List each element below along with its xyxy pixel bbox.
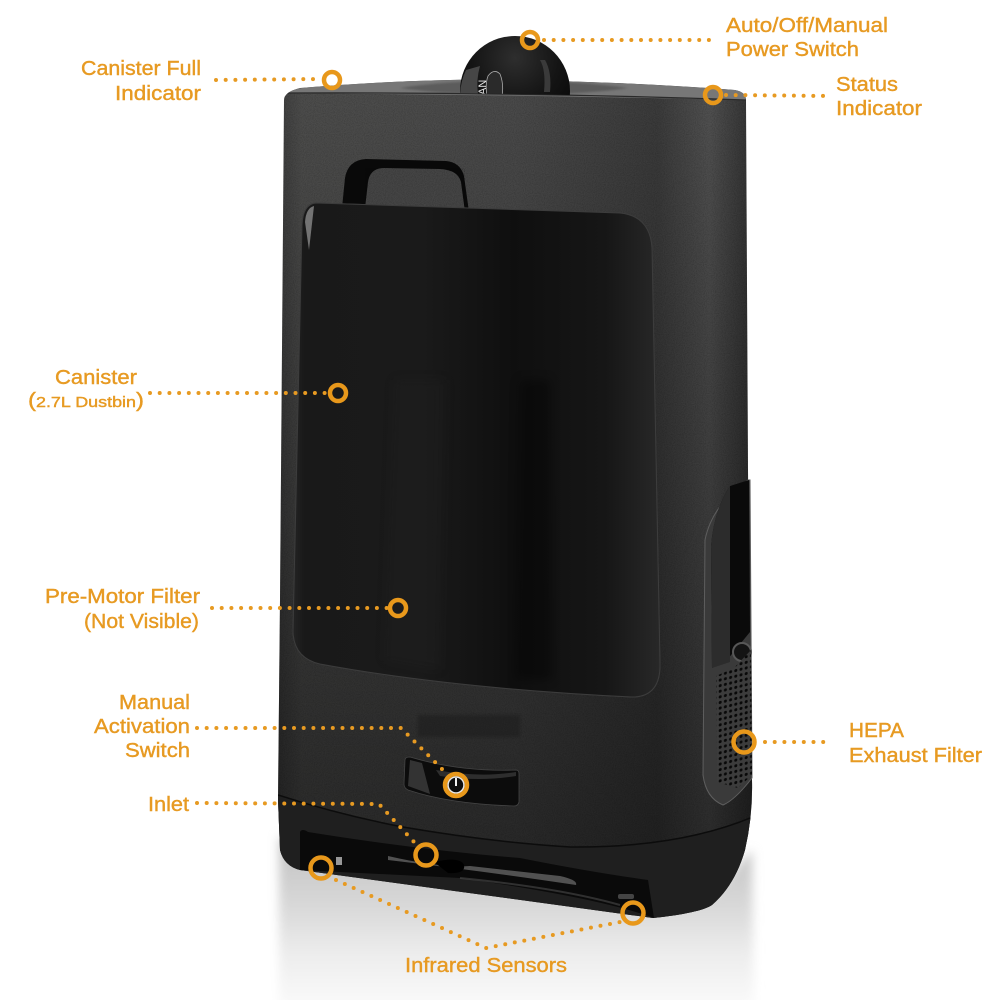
vacuum body bbox=[270, 80, 770, 920]
callout: inlet: Inlet bbox=[148, 794, 189, 816]
callout: inlet bbox=[148, 794, 436, 866]
canister handle recess bbox=[342, 159, 469, 212]
HEPA side panel bbox=[703, 480, 752, 805]
callout: status indicator bbox=[705, 74, 922, 120]
callout: status indicator: Status bbox=[836, 74, 898, 96]
callout: pre-motor filter bbox=[45, 586, 406, 633]
callout: canister full indicator: Canister Full bbox=[81, 58, 201, 80]
callout: canister: Canister bbox=[55, 367, 137, 389]
callout: canister full indicator bbox=[81, 58, 340, 105]
callout: canister: (2.7L Dustbin ) bbox=[28, 390, 144, 412]
callout: HEPA exhaust filter bbox=[734, 720, 982, 767]
callout: power switch: Auto/Off/Manual bbox=[726, 15, 888, 37]
callout: HEPA exhaust filter: HEPA bbox=[849, 720, 905, 742]
callout: canister bbox=[28, 367, 346, 412]
base band bbox=[278, 795, 755, 920]
callout: status indicator: Indicator bbox=[836, 98, 922, 120]
manual activation button bbox=[404, 757, 519, 806]
callout: infrared sensors: Infrared Sensors bbox=[405, 955, 567, 977]
callout: manual activation switch: Switch bbox=[125, 740, 190, 762]
callout: infrared sensors bbox=[310, 858, 644, 977]
callout: pre-motor filter: (Not Visible) bbox=[84, 611, 199, 633]
callout: manual activation switch: Manual bbox=[119, 692, 190, 714]
callout: manual activation switch: Activation bbox=[94, 716, 190, 738]
callout: manual activation switch bbox=[94, 692, 467, 796]
top surface bbox=[284, 80, 746, 100]
callout: pre-motor filter: Pre-Motor Filter bbox=[45, 586, 200, 608]
power knob bbox=[460, 36, 570, 95]
callout: HEPA exhaust filter: Exhaust Filter bbox=[849, 745, 982, 767]
blurred logo patch bbox=[418, 715, 520, 737]
callout: power switch: Power Switch bbox=[726, 39, 859, 61]
callout: canister full indicator: Indicator bbox=[115, 83, 201, 105]
floor reflection bbox=[279, 835, 754, 1000]
inlet recess bbox=[300, 830, 654, 918]
canister bbox=[293, 203, 660, 697]
power knob: AN bbox=[477, 80, 489, 95]
callout: power switch bbox=[522, 15, 888, 61]
